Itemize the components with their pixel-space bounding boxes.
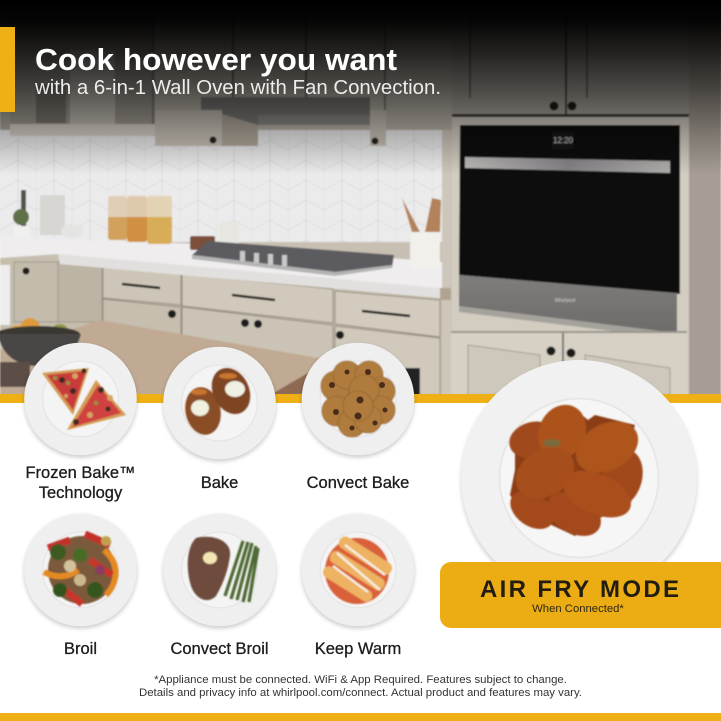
yellow accent block <box>0 27 15 112</box>
cooktop <box>192 241 394 276</box>
dark top gradient <box>0 0 721 175</box>
label: Convect Broil: Convect Broil <box>170 640 269 658</box>
plate: baked potatoes <box>163 347 276 462</box>
lower cabinets <box>0 255 442 395</box>
plate: keep warm enchiladas <box>302 514 414 628</box>
bottom stripe <box>0 713 721 721</box>
yellow stripe <box>0 394 721 403</box>
label: Bake: Bake <box>201 474 238 492</box>
lower wall cabinet <box>451 331 687 395</box>
countertop <box>0 238 443 289</box>
label: Convect Bake: Convect Bake <box>307 474 409 492</box>
footnote: *Appliance must be connected. WiFi & App Required. Features subject to change. <box>154 674 567 686</box>
large plate: air fried wings <box>459 360 699 562</box>
range hood <box>201 97 370 146</box>
subtitle: with a 6-in-1 Wall Oven with Fan Convection. <box>34 77 441 99</box>
title: Cook however you want <box>35 43 397 77</box>
canisters and shelf items <box>13 190 239 250</box>
wall oven cabinet <box>452 118 689 394</box>
label: Broil: Broil <box>64 640 97 658</box>
wall oven: 12:20 <box>553 136 574 145</box>
footnote: Details and privacy info at whirlpool.com/connect. Actual product and features may vary. <box>139 687 582 699</box>
label: Keep Warm: Keep Warm <box>315 640 401 658</box>
air fry heading: AIR FRY MODE <box>480 576 679 603</box>
kitchen photo <box>0 0 721 395</box>
fruit bowl <box>0 318 81 366</box>
backsplash <box>0 130 442 242</box>
island counter <box>0 320 330 395</box>
plate: cookies <box>302 343 414 458</box>
wall oven <box>459 125 680 339</box>
label: Frozen Bake Technology: Technology <box>39 484 123 502</box>
plate: steak and asparagus <box>163 514 276 628</box>
plate: frozen bake pizza <box>24 343 137 458</box>
air fry banner <box>440 562 721 628</box>
when connected note: When Connected* <box>532 603 624 615</box>
plate: broil vegetables <box>24 514 137 628</box>
utensil crock <box>402 198 441 269</box>
footnote <box>139 674 582 699</box>
wall oven: Whirlpool <box>555 298 575 304</box>
label: Frozen Bake Technology: Frozen Bake™ <box>25 464 136 482</box>
